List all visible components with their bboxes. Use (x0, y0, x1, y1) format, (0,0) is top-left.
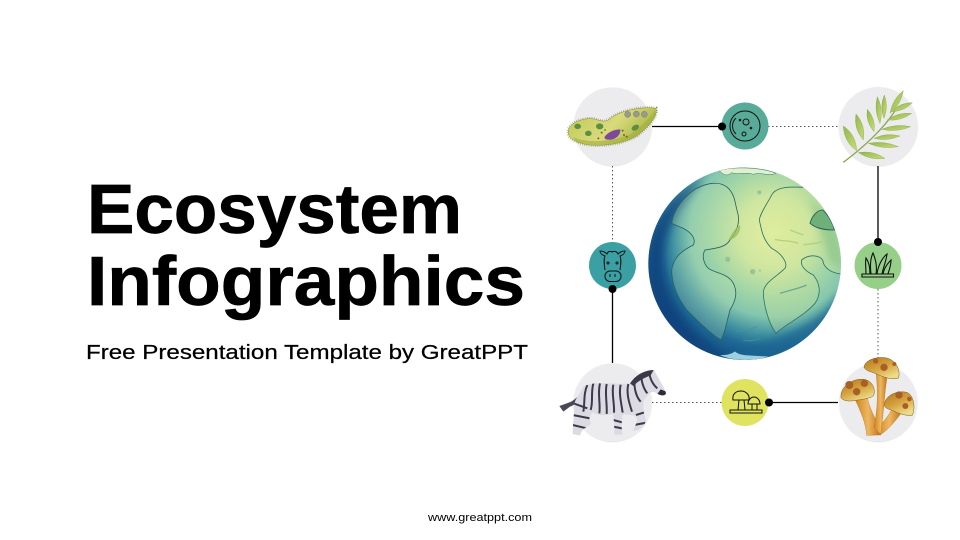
connector lines (612, 126, 878, 402)
left continent (672, 183, 739, 340)
right continent (759, 187, 843, 333)
connector dots (608, 122, 882, 406)
globe illustration (648, 167, 843, 367)
panel: plant circle (839, 87, 918, 166)
panel: zebra circle (559, 363, 667, 441)
icon: grass on green circle (854, 242, 902, 289)
polar ice (719, 168, 776, 175)
illustration: fern leaf (843, 91, 912, 162)
green island (810, 210, 835, 230)
footer url: www.greatppt.com (427, 512, 532, 524)
illustration: zebra (559, 369, 667, 436)
panel: mushroom circle (839, 357, 917, 441)
icon: zebra head on blue circle (589, 242, 636, 289)
panel: microorganism circle (568, 87, 656, 165)
title (87, 170, 525, 320)
illustration: paramecium (568, 108, 656, 145)
slide canvas (88, 87, 918, 524)
title: Ecosystem (87, 170, 462, 248)
title: Infographics (87, 242, 525, 320)
icon: mushrooms on yellow circle (722, 379, 768, 426)
illustration: mushrooms (841, 357, 914, 435)
subtitle: Free Presentation Template by GreatPPT (86, 342, 528, 364)
icon: microbe on teal circle (722, 102, 768, 150)
